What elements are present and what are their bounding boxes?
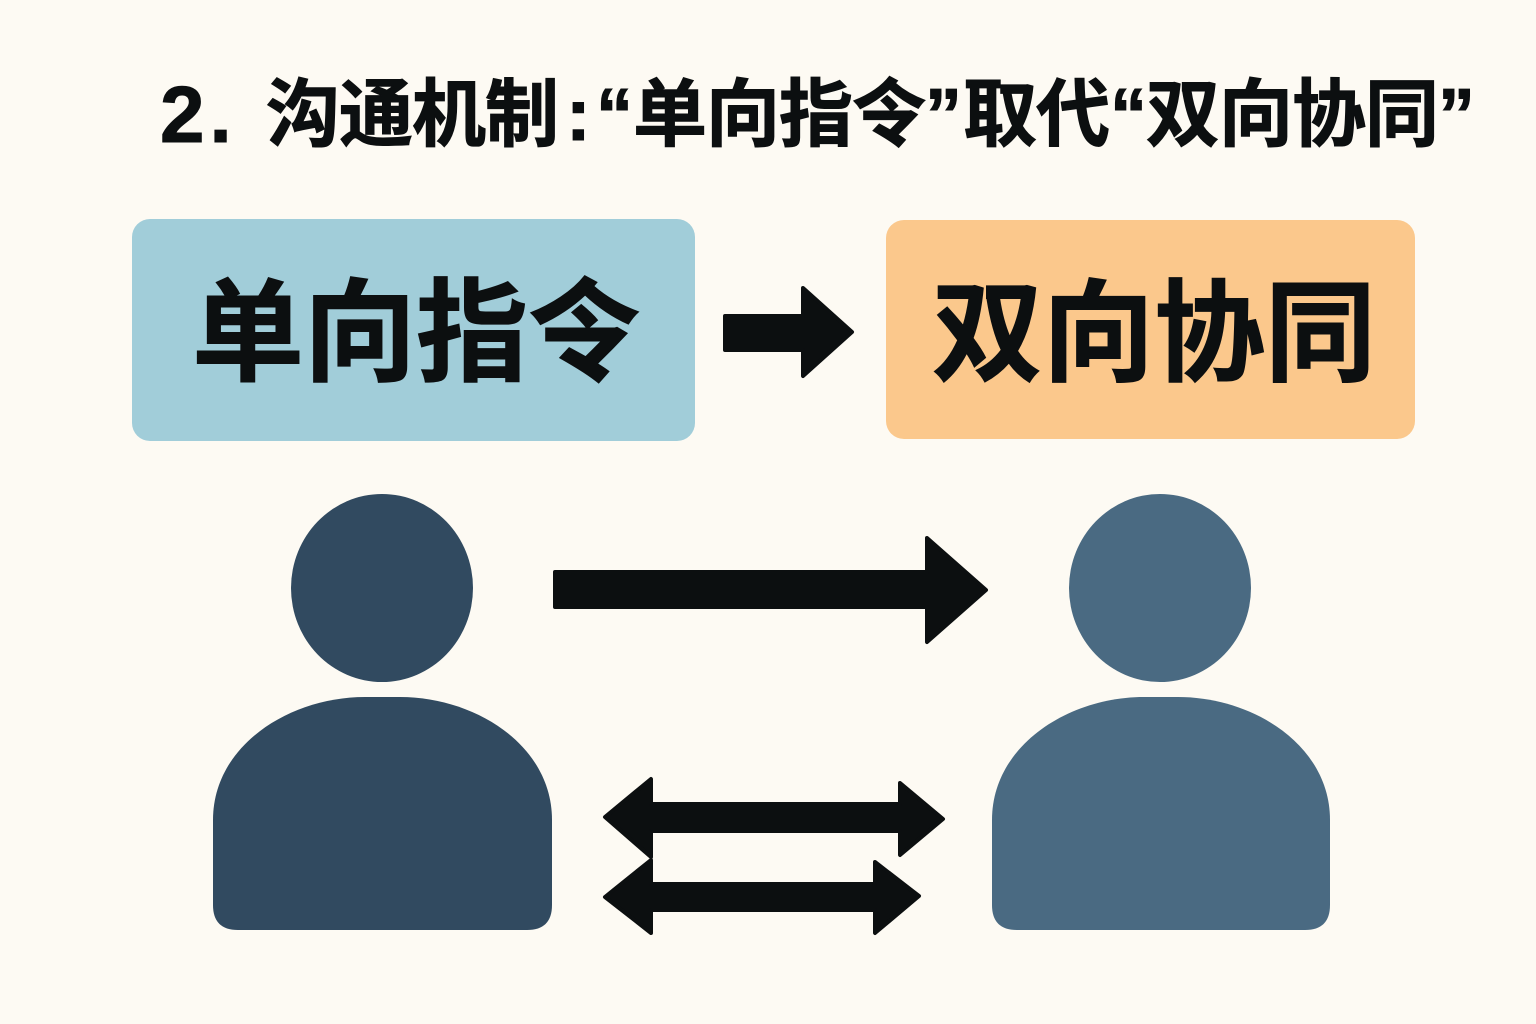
arrow: two-way upper [605,779,943,857]
label: two-way collaboration: 双向协同 [932,272,1376,396]
title: 2. [160,70,237,159]
title: “ [596,73,632,156]
icon: left person [213,494,552,930]
panel: two-way collaboration [886,220,1415,439]
icon: right person [992,494,1330,930]
title: “ [1110,73,1146,156]
title: 取代 [963,73,1109,156]
panel: one-way command [132,219,695,441]
title: 沟通机制 [266,73,558,156]
label: one-way command: 单向指令 [192,271,640,396]
title: 双向协同 [1146,73,1438,156]
title: 单向指令 [633,73,925,156]
title: : [566,73,590,156]
title: ” [925,73,961,156]
arrow: top replaces [725,288,852,376]
arrow: one-way long [555,538,986,642]
title: ” [1438,73,1474,156]
arrow: two-way lower [605,860,919,933]
title [160,70,1474,159]
